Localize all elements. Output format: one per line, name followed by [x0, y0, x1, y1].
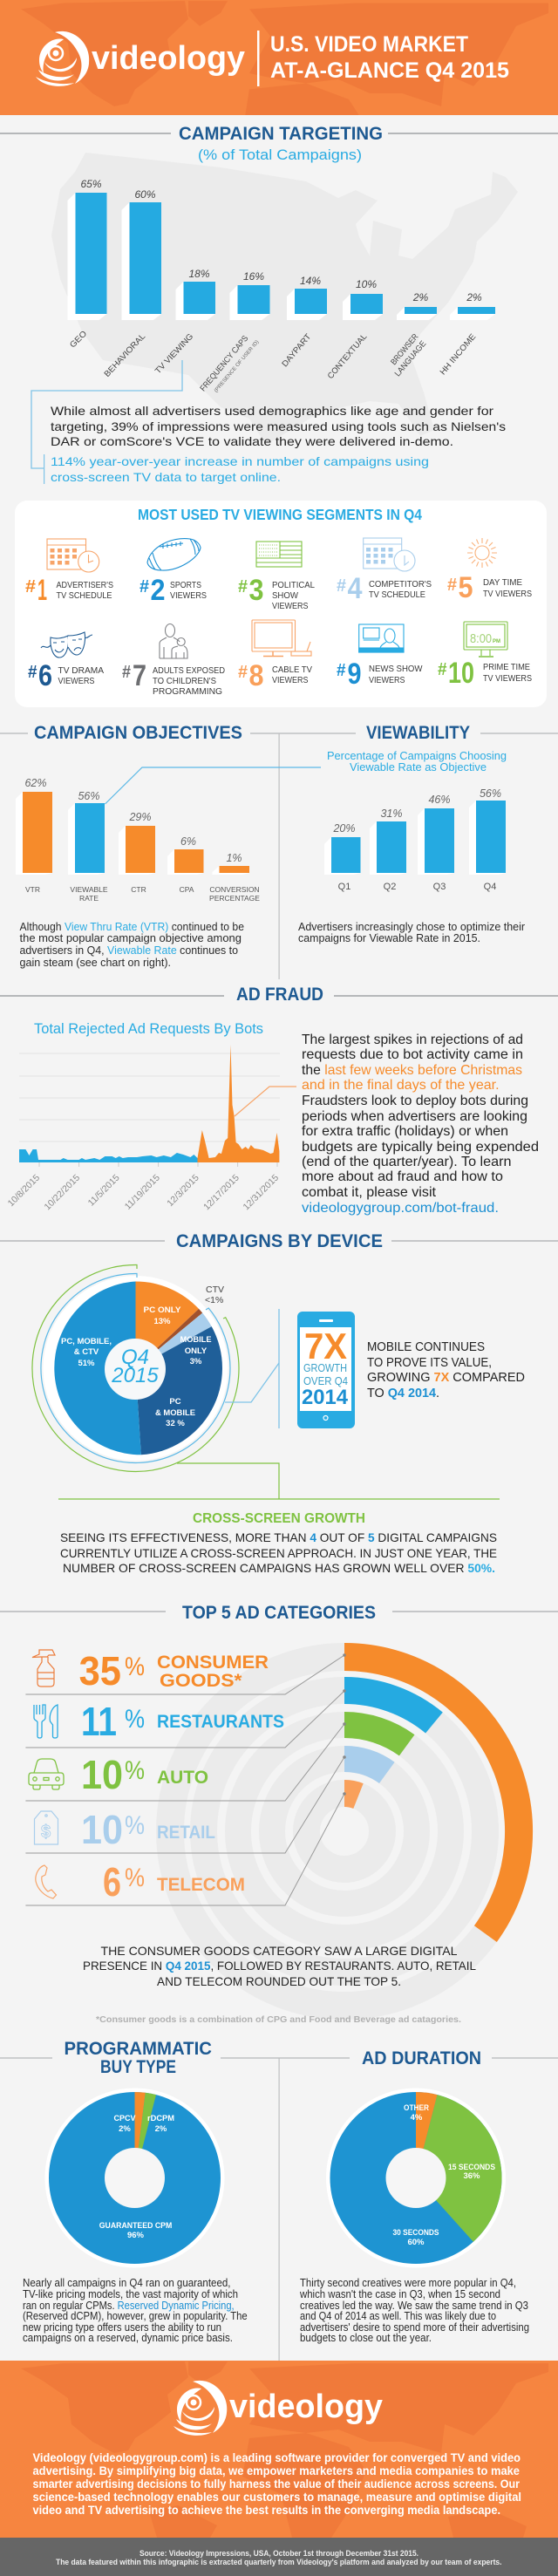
bar chart: targeting: 2% — [412, 291, 429, 303]
radial bar chart: ad categories — [170, 1643, 533, 2006]
US map background — [51, 153, 518, 445]
ad fraud text: videologygroup.com/bot-fraud. — [302, 1201, 499, 1216]
objectives text: the most popular campaign objective among — [19, 932, 242, 944]
panel: viewability chart: Percentage of Campaigns Choosing — [327, 749, 507, 762]
heading: campaign targeting: CAMPAIGN TARGETING — [179, 124, 383, 144]
bar chart: targeting: 16% — [243, 270, 264, 283]
targeting text block: DAR or comScore's VCE to validate they were delivered in-demo. — [51, 434, 453, 448]
icon: phone with 7X growth: 7X — [304, 1325, 347, 1366]
panel: campaign objectives chart: 62% — [24, 777, 47, 789]
heading: campaign targeting — [0, 124, 558, 163]
icon: adult and child — [160, 624, 187, 658]
icon: price tag — [35, 1811, 58, 1844]
footer banner — [0, 2361, 558, 2538]
#2 sports viewers: VIEWERS — [170, 590, 207, 601]
programmatic text: Nearly all campaigns in Q4 ran on guaranteed, — [23, 2277, 230, 2289]
#10 prime time TV viewers — [438, 657, 532, 690]
#2 sports viewers: # — [140, 577, 149, 596]
#1 advertiser's TV schedule: # — [25, 577, 36, 596]
category: telecom — [36, 1859, 245, 1905]
bar chart: targeting: 65% — [80, 178, 102, 190]
#7 adults exposed to children's programming: TO CHILDREN'S — [153, 676, 216, 686]
connector: spike to text — [235, 1087, 296, 1116]
bar chart: targeting: FREQUENCY CAPS — [198, 334, 250, 393]
area chart: total rejected ad requests by bots: 12/17/2015 — [201, 1173, 242, 1212]
#1 advertiser's TV schedule: ADVERTISER'S — [56, 580, 113, 590]
icon: price tag: $ — [41, 1823, 51, 1842]
panel: campaign objectives chart: 56% — [78, 790, 100, 802]
cross-screen growth text — [60, 1511, 497, 1575]
#2 sports viewers: 2 — [150, 574, 166, 607]
panel: viewability chart: 46% — [428, 794, 451, 806]
bar chart: targeting: (PRESENCE OF USER ID) — [214, 339, 261, 394]
icon: prime time clock TV: PM — [493, 639, 500, 644]
panel: viewability chart: Q2 — [384, 882, 396, 892]
ad fraud text: The largest spikes in rejections of ad — [302, 1032, 523, 1047]
panel: viewability chart: 20% — [332, 822, 356, 835]
header world map — [21, 1, 548, 115]
category: auto: AUTO — [157, 1768, 208, 1788]
programmatic text: TV-like pricing models, the vast majority of which — [23, 2288, 238, 2300]
icon: cable TV — [252, 620, 311, 656]
bar chart: targeting: 60% — [134, 188, 156, 201]
area chart: total rejected ad requests by bots: 11/19/2015 — [123, 1173, 162, 1212]
icon: spray bottle — [32, 1650, 55, 1687]
#5 day time TV viewers: # — [447, 576, 457, 595]
ad duration text: budgets to close out the year. — [300, 2332, 432, 2344]
icon: calendar with clock — [47, 539, 99, 572]
blue bracket arc — [41, 1273, 230, 1462]
bar chart: targeting: BEHAVIORAL — [103, 332, 147, 379]
heading: campaigns by device: CAMPAIGNS BY DEVICE — [176, 1231, 383, 1251]
targeting text block: While almost all advertisers used demographics like age and gender for — [51, 404, 493, 418]
#1 advertiser's TV schedule: TV SCHEDULE — [56, 590, 112, 601]
area chart: total rejected ad requests by bots: Total Rejected Ad Requests By Bots — [34, 1020, 263, 1037]
footnote: *Consumer goods is a combination of CPG and Food and Beverage ad catagories. — [96, 2015, 461, 2025]
ad fraud text: and in the final days of the year. — [302, 1078, 500, 1093]
#4 competitor's TV schedule: TV SCHEDULE — [369, 589, 425, 600]
ad fraud text: periods when advertisers are looking — [302, 1109, 527, 1124]
panel: campaign objectives chart: VIEWABLE — [70, 885, 108, 894]
ad categories text: THE CONSUMER GOODS CATEGORY SAW A LARGE DIGITAL — [101, 1944, 458, 1958]
category: consumer goods — [32, 1648, 269, 1693]
category: auto — [29, 1752, 208, 1797]
pie chart: campaigns by device: <1% — [205, 1295, 223, 1305]
mobile text: GROWING 7X COMPARED — [367, 1370, 525, 1385]
source bar — [0, 2538, 558, 2576]
about text — [33, 2450, 521, 2517]
heading: ad fraud: AD FRAUD — [236, 985, 323, 1005]
about text: science-based technology enables our customers to manage, measure and optimise digital — [33, 2490, 521, 2504]
category: retail: 10 — [81, 1807, 123, 1852]
icon: telephone handset — [36, 1865, 56, 1898]
#10 prime time TV viewers: TV VIEWERS — [483, 673, 532, 684]
#3 political show viewers: # — [238, 577, 248, 596]
icon: car — [29, 1759, 64, 1789]
#7 adults exposed to children's programming: PROGRAMMING — [153, 686, 222, 697]
donut chart: programmatic buy type: rDCPM — [147, 2114, 174, 2123]
#6 TV drama viewers: TV DRAMA — [58, 665, 104, 676]
about text: video and TV advertising to achieve the best results in the converging media landscape. — [33, 2503, 500, 2517]
source text: Source: Videology Impressions, USA, October 1st through December 31st 2015. — [140, 2549, 418, 2558]
#9 news show viewers: NEWS SHOW — [369, 664, 423, 674]
donut chart: ad duration: 60% — [407, 2238, 425, 2247]
pie chart: campaigns by device: 13% — [153, 1317, 171, 1326]
panel: campaign objectives chart: CTR — [131, 885, 146, 894]
icon: phone with 7X growth: GROWTH — [303, 1361, 347, 1374]
#1 advertiser's TV schedule: 1 — [37, 574, 47, 607]
panel: campaign objectives chart: 29% — [128, 811, 152, 823]
pie centre label: Q4 — [121, 1346, 149, 1369]
category: auto: 10 — [81, 1752, 123, 1797]
area chart: total rejected ad requests by bots: 12/31/2015 — [241, 1173, 281, 1212]
mobile text: MOBILE CONTINUES — [367, 1339, 485, 1354]
footer logo wordmark: videology — [229, 2389, 383, 2425]
#4 competitor's TV schedule — [337, 572, 432, 605]
icon: phone with 7X growth — [297, 1312, 355, 1428]
pie chart: campaigns by device: MOBILE — [180, 1335, 211, 1345]
#3 political show viewers: SHOW — [272, 590, 298, 601]
area chart: total rejected ad requests by bots: 11/5/2015 — [86, 1173, 122, 1209]
bar chart: targeting: 14% — [300, 275, 321, 287]
title: U.S. VIDEO MARKET — [270, 32, 468, 57]
#8 cable TV viewers — [238, 659, 312, 692]
donut chart: ad duration — [326, 2088, 506, 2267]
programmatic text: campaigns on a reserved, dynamic price basis. — [23, 2332, 233, 2344]
panel: viewability chart: Q3 — [433, 882, 446, 892]
area chart: total rejected ad requests by bots — [6, 1020, 281, 1212]
#9 news show viewers: # — [337, 661, 345, 680]
ad duration text: Thirty second creatives were more popular in Q4, — [300, 2277, 516, 2289]
heading: campaign objectives and viewability: VIEWABILITY — [366, 723, 470, 743]
header logo wordmark: videology — [92, 40, 245, 77]
#10 prime time TV viewers: # — [438, 660, 446, 679]
#9 news show viewers — [337, 658, 423, 691]
header logo swirl — [36, 31, 89, 86]
area chart: total rejected ad requests by bots: 12/3/2015 — [165, 1173, 201, 1209]
pie chart: campaigns by device: PC, MOBILE, — [61, 1337, 112, 1346]
pie chart: campaigns by device: & CTV — [74, 1347, 99, 1357]
#6 TV drama viewers — [28, 659, 104, 692]
mobile text — [367, 1339, 525, 1400]
donut chart: programmatic buy type: 96% — [127, 2231, 145, 2240]
#6 TV drama viewers: # — [28, 663, 37, 682]
objectives text: Although View Thru Rate (VTR) continued to be — [19, 921, 244, 933]
leader lines — [25, 1653, 346, 1905]
#3 political show viewers: VIEWERS — [272, 601, 309, 611]
panel: viewability chart — [324, 749, 507, 892]
bar chart: targeting: HH INCOME — [439, 332, 478, 377]
bar chart: targeting: BROWSER — [389, 332, 420, 367]
#8 cable TV viewers: CABLE TV — [272, 664, 312, 675]
heading: campaign objectives and viewability: CAMPAIGN OBJECTIVES — [34, 723, 242, 743]
ad fraud text: for extra traffic (holidays) or when — [302, 1124, 508, 1139]
callout connector — [31, 360, 182, 468]
#6 TV drama viewers: VIEWERS — [58, 676, 94, 686]
objectives text: advertisers in Q4, Viewable Rate continues to — [19, 944, 238, 957]
connector: cross-screen — [58, 1463, 500, 1499]
green bracket arc — [32, 1264, 239, 1471]
#4 competitor's TV schedule: COMPETITOR'S — [369, 579, 432, 589]
pie chart: campaigns by device: PC — [169, 1397, 181, 1407]
ad duration text: and Q4 of 2014 as well. This was likely due to — [300, 2310, 496, 2322]
panel: viewability chart: Q4 — [484, 882, 496, 892]
connector: viewable rate to viewability — [105, 767, 321, 804]
cross-screen growth text: CROSS-SCREEN GROWTH — [193, 1511, 365, 1526]
pie chart: campaigns by device: & MOBILE — [155, 1408, 195, 1418]
objectives text — [19, 921, 244, 969]
title: AT-A-GLANCE Q4 2015 — [270, 58, 509, 83]
donut chart: programmatic buy type: 2% — [119, 2124, 131, 2134]
icon: news show — [359, 624, 404, 652]
bar chart: targeting: TV VIEWING — [153, 332, 195, 376]
programmatic text: (Reserved dCPM), however, grew in popularity. The — [23, 2310, 248, 2322]
category: telecom: 6 — [103, 1859, 121, 1905]
panel: viewability chart: Q1 — [338, 882, 350, 892]
cross-screen growth text: SEEING ITS EFFECTIVENESS, MORE THAN 4 OUT OF 5 DIGITAL CAMPAIGNS — [60, 1530, 497, 1544]
donut chart: ad duration: OTHER — [404, 2103, 429, 2113]
bar chart: targeting: 2% — [466, 291, 482, 303]
category: restaurants: 11 — [81, 1699, 117, 1744]
#7 adults exposed to children's programming: 7 — [133, 659, 146, 692]
programmatic text: new pricing type offers users the ability to run — [23, 2321, 221, 2334]
#5 day time TV viewers — [447, 571, 532, 604]
pie chart: campaigns by device: 51% — [78, 1359, 95, 1368]
#7 adults exposed to children's programming: # — [122, 663, 131, 682]
icon: flag — [256, 542, 302, 567]
bar chart: targeting: CONTEXTUAL — [326, 332, 369, 381]
#4 competitor's TV schedule: # — [337, 576, 346, 596]
#2 sports viewers — [140, 574, 207, 607]
pie chart: campaigns by device: ONLY — [185, 1346, 208, 1356]
category: consumer goods: 35 — [79, 1648, 121, 1693]
category: restaurants: RESTAURANTS — [157, 1712, 284, 1732]
targeting text block: targeting, 39% of impressions were measured using tools such as Nielsen's — [51, 419, 506, 433]
#8 cable TV viewers: # — [238, 663, 248, 682]
mobile text: TO Q4 2014. — [367, 1386, 439, 1400]
#8 cable TV viewers: 8 — [249, 659, 263, 692]
panel: campaign objectives chart: 1% — [226, 852, 242, 864]
area chart: total rejected ad requests by bots: 10/22/2015 — [42, 1173, 82, 1212]
#10 prime time TV viewers: 10 — [448, 657, 474, 690]
#2 sports viewers: SPORTS — [170, 580, 201, 590]
pie chart: campaigns by device: 3% — [190, 1357, 202, 1366]
connector: mobile to phone — [225, 1309, 279, 1428]
icon: football — [147, 539, 201, 570]
heading: programmatic buy type and ad duration: BUY TYPE — [100, 2057, 176, 2077]
#9 news show viewers: VIEWERS — [369, 675, 405, 685]
bar chart: targeting: DAYPART — [280, 332, 313, 369]
category: restaurants: % — [125, 1705, 145, 1734]
category: restaurants — [34, 1699, 284, 1744]
#8 cable TV viewers: VIEWERS — [272, 675, 309, 685]
ad fraud text: (end of the quarter/year). To learn — [302, 1155, 511, 1169]
viewability text: campaigns for Viewable Rate in 2015. — [298, 932, 480, 944]
icon: fork and knife — [34, 1705, 58, 1738]
panel: viewability chart: 56% — [480, 787, 501, 800]
donut chart: ad duration: 36% — [463, 2171, 480, 2181]
highlight text — [51, 454, 429, 484]
heading: programmatic buy type and ad duration — [0, 2039, 558, 2077]
#6 TV drama viewers: 6 — [38, 659, 52, 692]
ad fraud text: Fraudsters look to deploy bots during — [302, 1094, 528, 1108]
donut chart: programmatic buy type: CPCV — [113, 2114, 136, 2123]
panel heading: MOST USED TV VIEWING SEGMENTS IN Q4 — [138, 506, 422, 523]
panel: campaign objectives chart — [16, 777, 260, 903]
icon: phone with 7X growth: OVER Q4 — [303, 1374, 348, 1387]
panel: campaign objectives chart: PERCENTAGE — [209, 894, 260, 903]
ad fraud text: more about ad fraud and how to — [302, 1169, 503, 1184]
area chart: total rejected ad requests by bots: 10/8/2015 — [6, 1173, 42, 1209]
highlight text: cross-screen TV data to target online. — [51, 470, 281, 484]
icon: prime time clock TV: 8:00 — [470, 631, 492, 646]
icon: phone with 7X growth: 2014 — [302, 1386, 349, 1409]
viewability text: Advertisers increasingly chose to optimize their — [298, 921, 525, 933]
category: retail: % — [125, 1811, 145, 1840]
category: consumer goods: CONSUMER — [157, 1653, 269, 1673]
icon: theatre masks — [41, 632, 92, 658]
footer world map — [21, 2361, 548, 2538]
donut chart: ad duration: 30 SECONDS — [392, 2228, 439, 2238]
about text: advertising. By simplifying big data, we empower marketers and media companies to make — [33, 2464, 520, 2477]
#10 prime time TV viewers: PRIME TIME — [483, 662, 530, 672]
pie chart: campaigns by device: CTV — [206, 1285, 224, 1295]
#5 day time TV viewers: DAY TIME — [483, 577, 522, 588]
category: auto: % — [125, 1756, 145, 1785]
ad duration text — [299, 2277, 529, 2344]
footer logo swirl — [174, 2381, 227, 2436]
donut chart: programmatic buy type: GUARANTEED CPM — [99, 2221, 172, 2231]
panel: campaign objectives chart: RATE — [79, 894, 99, 903]
panel: campaign objectives chart: 6% — [180, 835, 196, 848]
ad duration text: creatives led the way. We saw the same trend in Q3 — [300, 2300, 528, 2312]
mobile text: TO PROVE ITS VALUE, — [367, 1355, 492, 1370]
#9 news show viewers: 9 — [347, 658, 361, 691]
donut chart: ad duration: 15 SECONDS — [448, 2163, 495, 2172]
#4 competitor's TV schedule: 4 — [347, 572, 363, 605]
#3 political show viewers — [238, 574, 315, 611]
donut chart: programmatic buy type — [45, 2088, 225, 2267]
#3 political show viewers: POLITICAL — [272, 580, 315, 590]
about text: Videology (videologygroup.com) is a leading software provider for converged TV and video — [33, 2450, 521, 2464]
#3 political show viewers: 3 — [249, 574, 263, 607]
heading: top 5 ad categories: TOP 5 AD CATEGORIES — [182, 1603, 376, 1623]
panel: viewability chart: Viewable Rate as Objective — [350, 760, 487, 773]
#5 day time TV viewers: TV VIEWERS — [483, 589, 532, 599]
objectives text: gain steam (see chart on right). — [19, 957, 171, 969]
panel: viewability chart: 31% — [380, 808, 403, 820]
source text — [56, 2549, 502, 2566]
heading: programmatic buy type and ad duration: AD DURATION — [362, 2048, 481, 2068]
bar chart: targeting: 18% — [188, 268, 210, 280]
ad fraud text: the last few weeks before Christmas — [302, 1063, 522, 1078]
#5 day time TV viewers: 5 — [459, 571, 473, 604]
category: retail: RETAIL — [157, 1823, 215, 1843]
heading: campaign targeting: (% of Total Campaigns) — [198, 147, 362, 163]
title — [270, 32, 509, 83]
#1 advertiser's TV schedule — [25, 574, 113, 607]
ad fraud text: requests due to bot activity came in — [302, 1047, 523, 1062]
category: telecom: TELECOM — [157, 1875, 245, 1895]
programmatic text — [23, 2277, 248, 2344]
#7 adults exposed to children's programming — [122, 659, 225, 697]
bar chart: targeting: 10% — [356, 278, 377, 290]
panel: most used TV viewing segments — [15, 501, 547, 707]
section: campaign targeting — [0, 124, 558, 484]
pie centre label: 2015 — [111, 1364, 159, 1387]
heading: programmatic buy type and ad duration: PROGRAMMATIC — [65, 2039, 212, 2059]
pie chart: campaigns by device: 32 % — [166, 1419, 185, 1428]
highlight text: 114% year-over-year increase in number of campaigns using — [51, 454, 429, 468]
ad duration text: which wasn't the case in Q3, when 15 second — [299, 2288, 500, 2300]
ad categories text: AND TELECOM ROUNDED OUT THE TOP 5. — [157, 1974, 401, 1988]
donut chart: ad duration: 4% — [411, 2113, 423, 2123]
pie chart: campaigns by device — [32, 1264, 239, 1471]
header banner — [0, 0, 558, 115]
category: consumer goods: % — [125, 1653, 145, 1681]
vertical divider — [279, 2058, 280, 2361]
vertical divider — [279, 733, 280, 979]
bar chart: targeting — [68, 178, 495, 394]
targeting text block — [51, 404, 506, 448]
cross-screen growth text: NUMBER OF CROSS-SCREEN CAMPAIGNS HAS GROWN WELL OVER 50%. — [63, 1561, 495, 1575]
category: retail — [35, 1807, 215, 1852]
cross-screen growth text: CURRENTLY UTILIZE A CROSS-SCREEN APPROACH. IN JUST ONE YEAR, THE — [60, 1546, 497, 1560]
icon: calendar with clock light — [364, 538, 415, 571]
pie centre label — [111, 1346, 159, 1387]
icon: sun — [467, 538, 497, 568]
donut chart: programmatic buy type: 2% — [155, 2124, 167, 2134]
icon: prime time clock TV — [464, 622, 507, 657]
header divider — [257, 31, 260, 86]
category: consumer goods: GOODS* — [160, 1671, 242, 1691]
heading: campaign objectives and viewability — [0, 723, 558, 743]
ad fraud text: combat it, please visit — [302, 1185, 437, 1200]
panel: campaign objectives chart: CONVERSION — [209, 885, 260, 894]
panel: campaign objectives chart: VTR — [25, 885, 40, 894]
source text: The data featured within this infographic is extracted quarterly from Videology's platform and analyzed by our team of experts. — [56, 2558, 502, 2566]
bar chart: targeting: LANGUAGE — [393, 339, 428, 378]
ad duration text: advertisers' desire to spend more of their advertising — [300, 2321, 529, 2334]
ad categories text — [83, 1944, 476, 1988]
ad fraud text: budgets are typically being expended — [302, 1140, 539, 1155]
programmatic text: ran on regular CPMs. Reserved Dynamic Pricing, — [23, 2300, 235, 2312]
ad fraud text — [302, 1032, 539, 1216]
category: telecom: % — [125, 1864, 145, 1892]
panel: campaign objectives chart: CPA — [180, 885, 194, 894]
ad categories text: PRESENCE IN Q4 2015, FOLLOWED BY RESTAURANTS. AUTO, RETAIL — [83, 1959, 476, 1973]
viewability text — [298, 921, 525, 944]
bar chart: targeting: GEO — [68, 329, 89, 350]
pie chart: campaigns by device: PC ONLY — [143, 1305, 181, 1315]
#7 adults exposed to children's programming: ADULTS EXPOSED — [153, 665, 225, 676]
